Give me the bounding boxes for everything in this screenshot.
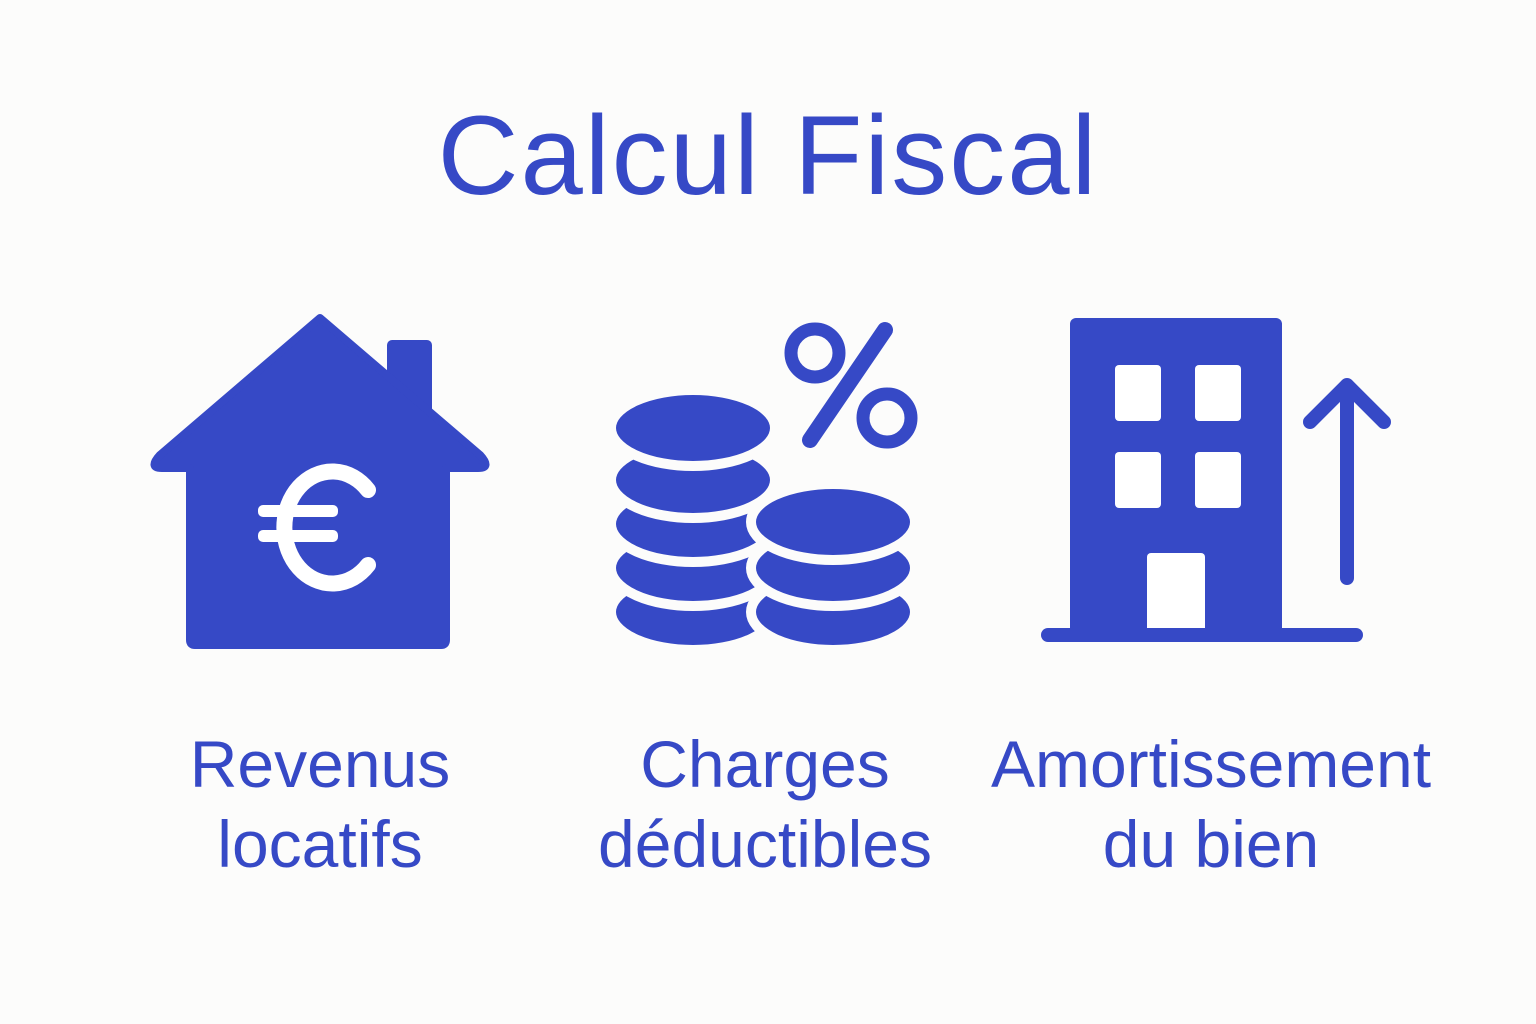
label: revenus locatifs: Revenus [190,727,450,801]
icon: building with arrow [1048,318,1384,635]
icon: coins with percent [611,329,915,650]
label: charges deductibles [598,727,932,881]
label: charges deductibles: Charges [640,727,890,801]
title: Calcul Fiscal [438,93,1098,218]
label: revenus locatifs [190,727,450,881]
icon: house with euro [154,318,486,645]
label: amortissement du bien: Amortissement [991,727,1431,801]
label: amortissement du bien [991,727,1431,881]
label: charges deductibles: déductibles [598,807,932,881]
label: revenus locatifs: locatifs [217,807,423,881]
label: amortissement du bien: du bien [1103,807,1319,881]
